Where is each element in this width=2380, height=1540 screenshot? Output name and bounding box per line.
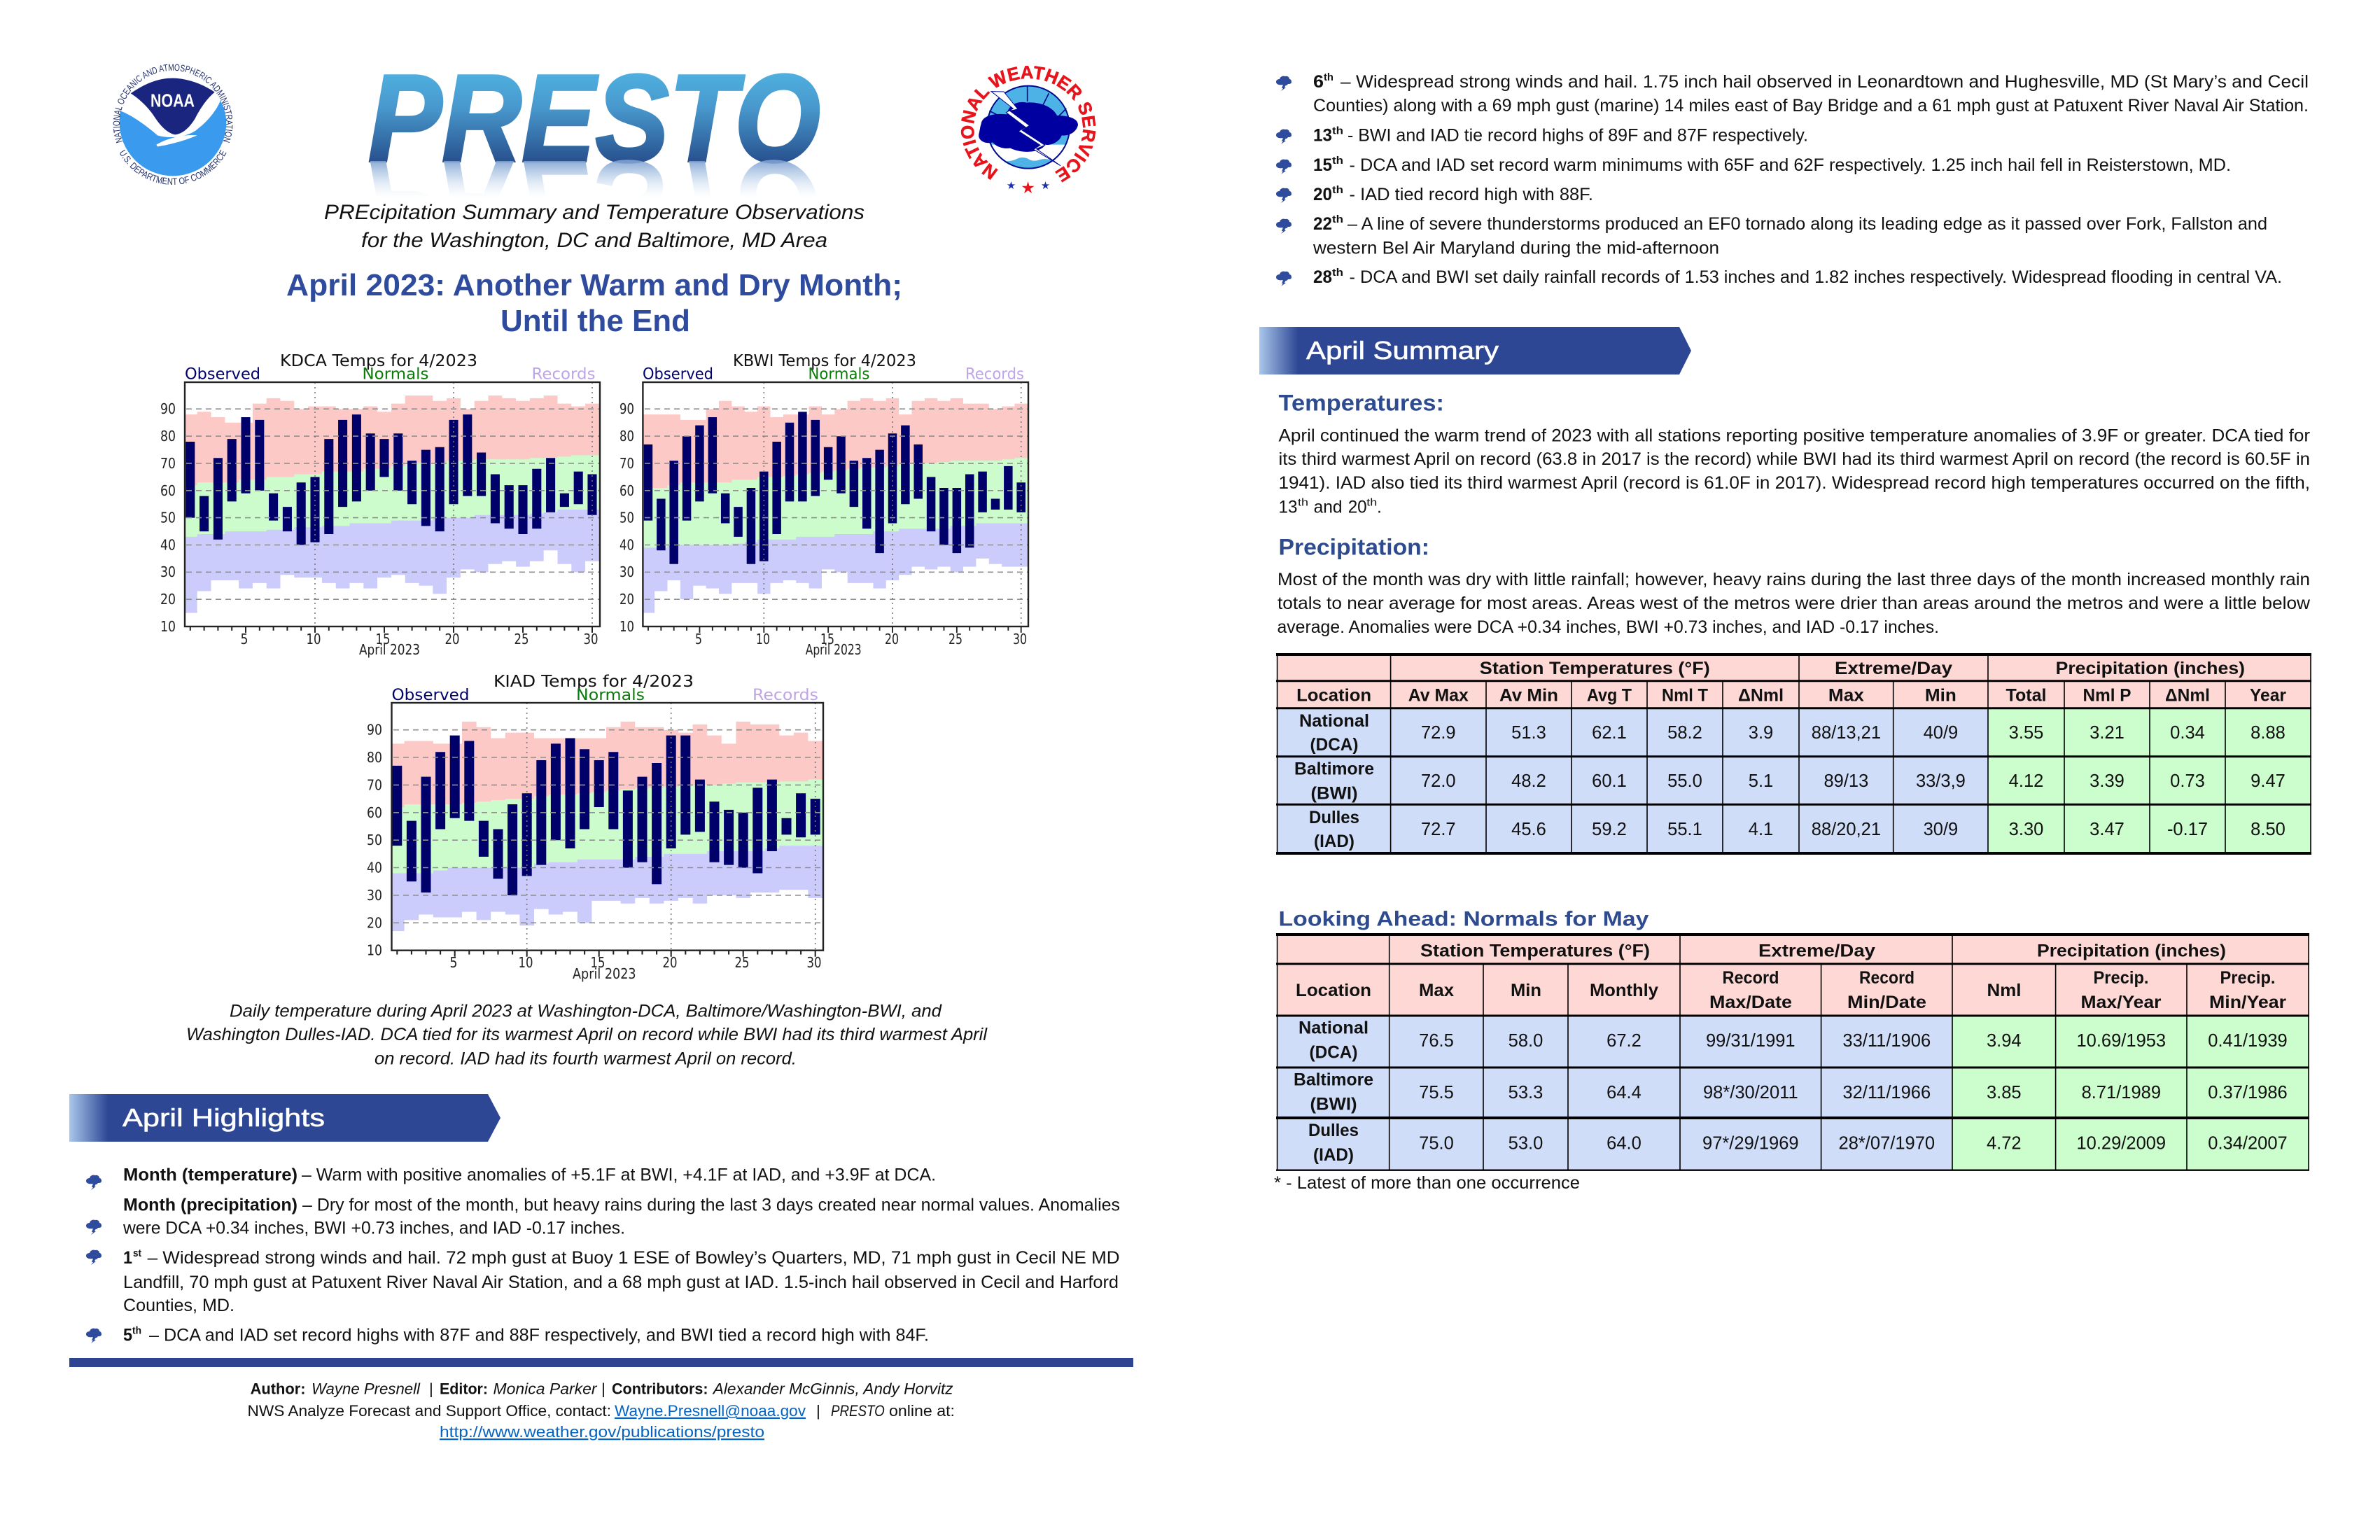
title: April 2023: Another Warm and Dry Month;	[286, 268, 902, 302]
row: Dulles IAD: 30/9	[1924, 820, 1958, 839]
highlight: monthly precipitation	[122, 1196, 1120, 1238]
heading: April Highlights	[69, 1094, 500, 1142]
chart: KDCA temperatures: 5	[241, 631, 248, 648]
table header: Max/Date	[1709, 993, 1792, 1012]
chart: KIAD temperatures: 60	[367, 804, 382, 821]
chart: KDCA temperatures: Records	[532, 366, 595, 384]
heading: Looking Ahead: Looking Ahead: Normals for May	[1278, 908, 1649, 931]
row: Dulles IAD: 4.72	[1987, 1134, 2022, 1154]
highlight: the 1st	[123, 1247, 1120, 1315]
icon: bullet	[1276, 272, 1292, 286]
row: Dulles IAD: Dulles	[1309, 808, 1359, 827]
row: Dulles IAD: 3.30	[2009, 820, 2043, 839]
table header: Station Temperatures (°F)	[1420, 941, 1650, 961]
text block: precipitation summary: Most of the month was dry with little rainfall; however, heavy rains during the last three days of the month increased monthly rain	[1278, 570, 2310, 589]
row: Dulles IAD: 4.1	[1749, 820, 1773, 839]
table: normals for May	[1276, 934, 2309, 1170]
chart: KDCA temperatures: 50	[160, 510, 176, 526]
chart: KIAD temperatures: 50	[367, 832, 382, 848]
list: April highlights	[86, 1166, 1120, 1345]
table header: Station Temperatures (°F)	[1480, 659, 1710, 678]
heading: Precipitation: Precipitation:	[1278, 535, 1429, 560]
table header	[1296, 941, 2286, 1012]
icon: bullet	[1276, 130, 1292, 144]
chart: KBWI temperatures: 20	[885, 631, 899, 648]
row: National DCA: 88/13,21	[1812, 723, 1881, 743]
chart: KIAD temperatures: 10	[367, 942, 382, 959]
footer credits: http://www.weather.gov/publications/presto	[440, 1423, 764, 1441]
text block: temperatures summary	[1278, 426, 2310, 517]
icon: National Weather Service logo: ★	[1041, 179, 1050, 192]
footer credits: |	[601, 1380, 606, 1397]
table header: Min/Date	[1847, 993, 1926, 1012]
chart: KBWI temperatures: 20	[620, 591, 634, 608]
row: Dulles IAD: 75.0	[1419, 1134, 1454, 1154]
highlight: monthly precipitation: Month (precipitation)	[123, 1196, 298, 1215]
row: Baltimore BWI: 64.4	[1606, 1083, 1642, 1102]
text block: temperatures summary: 1941). IAD also tied its third warmest April (record is 61.0F in 2017). Widespread record high temperatures occurred on the fifth,	[1278, 473, 2310, 493]
row: National DCA: 10.69/1953	[2076, 1031, 2166, 1051]
highlight: the 13th: th	[1332, 125, 1343, 137]
highlight: the 13th: - BWI and IAD tie record highs of 89F and 87F respectively.	[1348, 126, 1808, 146]
chart caption: on record. IAD had its fourth warmest April on record.	[374, 1049, 797, 1068]
highlight: the 15th: 15	[1313, 155, 1332, 175]
table header: Av Max	[1408, 686, 1469, 706]
row: National DCA: 76.5	[1419, 1031, 1454, 1051]
chart: KDCA temperatures: 30	[584, 631, 598, 648]
chart: KDCA temperatures: 70	[160, 455, 176, 472]
highlight: the 1st: – Widespread strong winds and hail. 72 mph gust at Buoy 1 ESE of Bowley’s Quarters, MD, 71 mph gust in Cecil NE MD	[148, 1248, 1120, 1268]
highlight: the 6th: Counties) along with a 69 mph gust (marine) 14 miles east of Bay Bridge and a 61 mph gust at Patuxent River Naval Air Station.	[1313, 96, 2309, 115]
table header: ΔNml	[1738, 686, 1784, 706]
table header: Max	[1828, 686, 1864, 706]
chart: KBWI temperatures: 80	[620, 428, 634, 444]
row: National DCA: 99/31/1991	[1706, 1031, 1795, 1051]
chart: KBWI temperatures: April 2023	[806, 641, 862, 658]
table header: Avg T	[1587, 686, 1632, 706]
chart: KIAD temperatures: Records	[752, 687, 818, 704]
text block: temperatures summary: 20	[1348, 498, 1367, 517]
footer credits: Author:	[251, 1380, 306, 1397]
chart: KDCA temperatures	[160, 352, 600, 658]
table header: Min	[1925, 686, 1956, 706]
table header: Max	[1419, 981, 1454, 1000]
chart: KDCA temperatures: April 2023	[359, 641, 420, 658]
icon: NOAA logo	[113, 64, 232, 185]
text block: temperatures summary: th	[1298, 497, 1308, 509]
footer credits: |	[429, 1380, 433, 1397]
row: National DCA: 40/9	[1924, 723, 1958, 743]
chart: KIAD temperatures: 90	[367, 722, 382, 738]
row: Baltimore BWI: 98*/30/2011	[1703, 1083, 1798, 1102]
icon: National Weather Service logo: ★	[1021, 179, 1035, 197]
chart caption: Washington Dulles-IAD. DCA tied for its warmest April on record while BWI had its third warmest April	[186, 1025, 988, 1044]
table header: Precipitation (inches)	[2056, 659, 2245, 678]
chart: KIAD temperatures: 25	[735, 954, 749, 971]
row: Dulles IAD: 97*/29/1969	[1702, 1134, 1799, 1154]
row: National DCA: 3.21	[2090, 723, 2124, 743]
row: National DCA: 8.88	[2250, 723, 2286, 743]
subtitle	[324, 201, 864, 252]
row: Baltimore BWI	[1294, 1070, 2288, 1114]
row: Dulles IAD: 0.34/2007	[2208, 1134, 2288, 1154]
chart: KBWI temperatures: 15	[820, 631, 834, 648]
row: Baltimore BWI: 0.37/1986	[2208, 1083, 2288, 1102]
icon: bullet	[1276, 76, 1292, 91]
chart: KBWI temperatures: KBWI Temps for 4/2023	[733, 352, 916, 370]
title: Until the End	[500, 304, 690, 338]
highlight: the 22nd: 22	[1313, 214, 1332, 234]
text block: temperatures summary: th	[1366, 497, 1377, 509]
chart: KBWI temperatures: Normals	[808, 366, 869, 384]
chart: KBWI temperatures: 10	[620, 618, 634, 635]
icon: NOAA logo: NATIONAL OCEANIC AND ATMOSPHERIC ADMINISTRATION	[113, 64, 232, 143]
table header: Min	[1511, 981, 1541, 1000]
icon: National Weather Service logo: ★	[1007, 179, 1016, 192]
row: Dulles IAD: 45.6	[1511, 820, 1546, 839]
chart: KBWI temperatures: 50	[620, 510, 634, 526]
table header: Max/Year	[2080, 993, 2162, 1012]
chart: KBWI temperatures: 30	[1013, 631, 1027, 648]
row: Dulles IAD	[1309, 808, 2286, 851]
chart: KDCA temperatures: 20	[445, 631, 459, 648]
chart: KBWI temperatures: 10	[756, 631, 770, 648]
table header: ΔNml	[2165, 686, 2210, 706]
chart: KBWI temperatures: 40	[620, 536, 634, 553]
row: Dulles IAD: 3.47	[2090, 820, 2124, 839]
list: highlights continued	[1276, 71, 2309, 287]
chart: KIAD temperatures: April 2023	[573, 965, 636, 982]
chart: KDCA temperatures: Normals	[363, 366, 428, 384]
row: Baltimore BWI: (BWI)	[1310, 1095, 1357, 1114]
highlight: the 5th: th	[132, 1325, 141, 1337]
chart: KIAD temperatures: Normals	[576, 687, 645, 704]
chart: KIAD temperatures	[367, 673, 823, 982]
chart: KBWI temperatures: 70	[620, 455, 634, 472]
chart: KBWI temperatures: 60	[620, 482, 634, 499]
chart: KDCA temperatures: 40	[160, 536, 176, 553]
row: Baltimore BWI: 33/3,9	[1916, 771, 1966, 791]
chart: KDCA temperatures: 60	[160, 482, 176, 499]
row: National DCA	[1299, 711, 2286, 755]
chart: KBWI temperatures: 5	[695, 631, 702, 648]
row: National DCA: (DCA)	[1310, 735, 1358, 755]
row: Baltimore BWI: 89/13	[1823, 771, 1868, 791]
row: Dulles IAD: 53.0	[1508, 1134, 1543, 1154]
row: National DCA: 51.3	[1511, 723, 1546, 743]
row: National DCA: 58.2	[1667, 723, 1702, 743]
footer credits	[248, 1380, 955, 1441]
chart: KIAD temperatures: 30	[367, 887, 382, 904]
footer credits: Wayne.Presnell@noaa.gov	[615, 1402, 806, 1420]
table header: Extreme/Day	[1758, 941, 1875, 961]
row: National DCA: 72.9	[1421, 723, 1456, 743]
row: Baltimore BWI: 5.1	[1749, 771, 1773, 791]
row: Baltimore BWI: 55.0	[1667, 771, 1702, 791]
title	[286, 268, 902, 338]
row: Baltimore BWI	[1294, 760, 2286, 804]
highlight: monthly precipitation: were DCA +0.34 inches, BWI +0.73 inches, and IAD -0.17 inches.	[122, 1218, 625, 1238]
highlight: the 20th: th	[1332, 184, 1343, 196]
row: National DCA	[1298, 1018, 2288, 1063]
table header: Location	[1296, 686, 1371, 706]
row: National DCA: 67.2	[1606, 1031, 1642, 1051]
icon: bullet	[1276, 219, 1292, 234]
row: Baltimore BWI: 9.47	[2250, 771, 2286, 791]
chart: KDCA temperatures: KDCA Temps for 4/2023	[280, 352, 477, 370]
table header: Precipitation (inches)	[2037, 941, 2226, 961]
icon: National Weather Service logo: NATIONAL WEATHER SERVICE	[960, 66, 1096, 183]
highlight: monthly precipitation: – Dry for most of the month, but heavy rains during the last 3 days created near normal values. Anomalies	[302, 1196, 1120, 1215]
chart: KIAD temperatures: KIAD Temps for 4/2023	[493, 673, 694, 691]
table header: Nml P	[2083, 686, 2131, 706]
chart: KIAD temperatures: 80	[367, 749, 382, 766]
table header: Nml	[1987, 981, 2022, 1000]
highlight: the 6th	[1313, 71, 2309, 115]
footer credits: Wayne Presnell	[312, 1380, 421, 1397]
highlight: the 22nd: western Bel Air Maryland during the mid-afternoon	[1312, 239, 1719, 258]
chart: KDCA temperatures: 90	[160, 400, 176, 417]
highlight: the 1st: 1	[123, 1248, 132, 1268]
row: National DCA: 3.55	[2009, 723, 2043, 743]
chart: KDCA temperatures: 20	[160, 591, 176, 608]
footer credits: |	[816, 1402, 820, 1420]
icon: bullet	[1276, 160, 1292, 174]
table header: Precip.	[2093, 968, 2149, 988]
row: Baltimore BWI: 4.12	[2009, 771, 2043, 791]
highlight: the 6th: th	[1324, 71, 1334, 83]
highlight: monthly temperature: – Warm with positive anomalies of +5.1F at BWI, +4.1F at IAD, and +3.9F at DCA.	[302, 1166, 936, 1185]
highlight: the 20th: - IAD tied record high with 88F.	[1350, 185, 1593, 204]
text block: precipitation summary: average. Anomalies were DCA +0.34 inches, BWI +0.73 inches, and IAD -0.17 inches.	[1277, 617, 1939, 637]
text block: precipitation summary	[1277, 570, 2311, 637]
row: Baltimore BWI: 48.2	[1511, 771, 1546, 791]
highlight: the 22nd	[1312, 214, 2267, 258]
row: Dulles IAD: 64.0	[1606, 1134, 1642, 1154]
row: Dulles IAD: 10.29/2009	[2076, 1134, 2166, 1154]
row: National DCA: 0.41/1939	[2208, 1031, 2288, 1051]
icon: NOAA logo: NOAA	[150, 90, 195, 111]
row: Baltimore BWI: 0.73	[2170, 771, 2205, 791]
chart: KBWI temperatures	[620, 352, 1028, 658]
highlight: the 22nd: – A line of severe thunderstorms produced an EF0 tornado along its leading edge as it passed over Fork, Fallston and	[1348, 214, 2267, 234]
row: National DCA: (DCA)	[1309, 1043, 1358, 1063]
chart: KIAD temperatures: 30	[806, 954, 822, 971]
highlight: the 6th: – Widespread strong winds and hail. 1.75 inch hail observed in Leonardtown and Hughesville, MD (St Mary’s and Cecil	[1340, 72, 2309, 92]
icon: bullet	[86, 1250, 102, 1265]
row: Baltimore BWI: (BWI)	[1310, 784, 1358, 804]
text block: temperatures summary: 13	[1278, 498, 1298, 517]
text block: temperatures summary: April continued the warm trend of 2023 with all stations reporting positive temperature anomalies of 3.9F or greater. DCA tied for	[1278, 426, 2310, 446]
highlight: the 6th: 6	[1313, 72, 1324, 92]
row: Dulles IAD: 28*/07/1970	[1839, 1134, 1935, 1154]
table header: Record	[1859, 968, 1914, 988]
footer credits: Contributors:	[612, 1380, 708, 1397]
table header: Total	[2006, 686, 2047, 706]
text block: precipitation summary: totals to near average for most areas. Areas west of the metros were drier than areas around the metros and were a little below	[1278, 594, 2311, 613]
chart: KBWI temperatures: 25	[948, 631, 962, 648]
chart: KDCA temperatures: 25	[514, 631, 529, 648]
chart: KBWI temperatures: Records	[965, 366, 1024, 384]
row: Baltimore BWI: 53.3	[1508, 1083, 1543, 1102]
chart: KIAD temperatures: 20	[662, 954, 678, 971]
row: National DCA: National	[1298, 1018, 1368, 1038]
icon: bullet	[86, 1220, 102, 1235]
footer credits: PRESTO	[831, 1402, 885, 1420]
row: Baltimore BWI: 32/11/1966	[1842, 1083, 1931, 1102]
footer credits: online at:	[889, 1402, 955, 1420]
highlight: the 13th: 13	[1313, 126, 1332, 146]
heading: April Highlights: April Highlights	[122, 1103, 325, 1132]
table header: Nml T	[1662, 686, 1708, 706]
highlight: the 5th: 5	[123, 1326, 132, 1345]
row: Baltimore BWI: 75.5	[1419, 1083, 1454, 1102]
row: Dulles IAD: Dulles	[1308, 1121, 1359, 1140]
highlight: the 28th: 28	[1313, 267, 1332, 287]
row: Baltimore BWI: 72.0	[1421, 771, 1456, 791]
row: National DCA: 62.1	[1592, 723, 1627, 743]
row: Dulles IAD: 59.2	[1592, 820, 1627, 839]
row: National DCA: 3.9	[1749, 723, 1773, 743]
heading: April Summary	[1259, 327, 1691, 374]
footer credits: Monica Parker	[493, 1380, 598, 1397]
chart: KDCA temperatures: 10	[307, 631, 321, 648]
chart: KBWI temperatures: 90	[620, 400, 634, 417]
table header: Record	[1722, 968, 1779, 988]
highlight: the 15th: - DCA and IAD set record warm minimums with 65F and 62F respectively. 1.25 inch hail fell in Reisterstown, MD.	[1350, 155, 2231, 175]
icon: bullet	[1276, 188, 1292, 203]
chart: KDCA temperatures: Observed	[185, 366, 260, 384]
footer credits: NWS Analyze Forecast and Support Office, contact:	[248, 1402, 611, 1420]
footer credits: Editor:	[440, 1380, 488, 1397]
table: April station summary	[1276, 654, 2311, 853]
row: Dulles IAD: (IAD)	[1314, 832, 1354, 851]
highlight: the 5th: – DCA and IAD set record highs with 87F and 88F respectively, and BWI tied a record high with 84F.	[149, 1326, 929, 1345]
row: Dulles IAD: -0.17	[2167, 820, 2208, 839]
chart: KIAD temperatures: Observed	[392, 687, 469, 704]
subtitle: PREcipitation Summary and Temperature Observations	[324, 201, 864, 224]
row: National DCA: 33/11/1906	[1842, 1031, 1931, 1051]
row: Dulles IAD: 55.1	[1667, 820, 1702, 839]
row: Baltimore BWI: 3.85	[1987, 1083, 2022, 1102]
chart: KBWI temperatures: Observed	[643, 366, 713, 384]
highlight: monthly temperature: Month (temperature)	[123, 1166, 298, 1185]
highlight: the 28th: th	[1332, 267, 1343, 279]
chart: KDCA temperatures: 80	[160, 428, 176, 444]
chart: KIAD temperatures: 40	[367, 860, 382, 876]
icon: bullet	[86, 1175, 102, 1190]
table header: Av Min	[1499, 686, 1558, 706]
row: National DCA: 58.0	[1508, 1031, 1543, 1051]
icon: NOAA logo: U.S. DEPARTMENT OF COMMERCE	[120, 150, 227, 185]
highlight: the 15th: th	[1332, 155, 1343, 167]
chart caption: Daily temperature during April 2023 at Washington-DCA, Baltimore/Washington-BWI, and	[230, 1002, 942, 1021]
highlight: the 28th: - DCA and BWI set daily rainfall records of 1.53 inches and 1.82 inches respectively. Widespread flooding in central VA.	[1350, 267, 2282, 287]
heading: Temperatures: Temperatures:	[1278, 391, 1444, 416]
table header: Year	[2250, 686, 2286, 706]
chart: KIAD temperatures: 20	[367, 914, 382, 931]
table header: Min/Year	[2209, 993, 2286, 1012]
icon: bullet	[86, 1329, 102, 1343]
highlight: the 22nd: th	[1332, 214, 1343, 225]
table header: Extreme/Day	[1835, 659, 1952, 678]
highlight: the 1st: st	[133, 1247, 141, 1259]
row: National DCA: 3.94	[1987, 1031, 2022, 1051]
row: Dulles IAD: 72.7	[1421, 820, 1456, 839]
footer credits: Alexander McGinnis, Andy Horvitz	[712, 1380, 953, 1397]
chart: KIAD temperatures: 10	[518, 954, 533, 971]
subtitle: for the Washington, DC and Baltimore, MD Area	[361, 229, 827, 252]
row: Baltimore BWI: 60.1	[1592, 771, 1627, 791]
chart: KIAD temperatures: 5	[449, 954, 458, 971]
highlight: the 20th: 20	[1313, 185, 1332, 204]
text block: temperatures summary: its third warmest April on record (63.8 in 2017 is the record) while BWI had its third warmest April on record (the record is 60.5F in	[1278, 449, 2310, 469]
row: National DCA: National	[1299, 711, 1369, 731]
row: National DCA: 0.34	[2170, 723, 2205, 743]
table header: Location	[1296, 981, 1371, 1000]
icon: PRESTO wordmark: PRESTO	[368, 49, 820, 188]
chart: KIAD temperatures: 15	[591, 954, 605, 971]
icon: PRESTO wordmark	[368, 49, 820, 273]
text block: temperatures summary: and	[1314, 498, 1343, 517]
chart: KIAD temperatures: 70	[367, 776, 382, 793]
icon: PRESTO wordmark: PRESTO	[368, 134, 820, 273]
text block: temperatures summary: .	[1377, 498, 1382, 517]
chart: KDCA temperatures: 30	[160, 564, 176, 580]
highlight: the 1st: Landfill, 70 mph gust at Patuxent River Naval Air Station, and a 68 mph gust at IAD. 1.5-inch hail observed in Cecil and Harford	[123, 1273, 1119, 1292]
footnote: * - Latest of more than one occurrence	[1274, 1173, 1580, 1193]
highlight: the 1st: Counties, MD.	[123, 1296, 234, 1315]
row: Dulles IAD: 88/20,21	[1812, 820, 1881, 839]
heading: April Summary: April Summary	[1306, 336, 1499, 365]
row: Baltimore BWI: Baltimore	[1294, 760, 1374, 779]
chart: KDCA temperatures: 15	[375, 631, 391, 648]
chart caption	[186, 1002, 988, 1068]
table header: Monthly	[1590, 981, 1658, 1000]
row: Baltimore BWI: 8.71/1989	[2082, 1083, 2161, 1102]
row: Dulles IAD: (IAD)	[1313, 1145, 1354, 1165]
row: Baltimore BWI: 3.39	[2090, 771, 2124, 791]
row: Dulles IAD: 8.50	[2250, 820, 2286, 839]
chart: KBWI temperatures: 30	[620, 564, 634, 580]
table header: Precip.	[2220, 968, 2275, 988]
chart: KDCA temperatures: 10	[160, 618, 176, 635]
row: Dulles IAD	[1308, 1121, 2288, 1165]
table header	[1296, 659, 2286, 706]
row: Baltimore BWI: Baltimore	[1294, 1070, 1373, 1090]
